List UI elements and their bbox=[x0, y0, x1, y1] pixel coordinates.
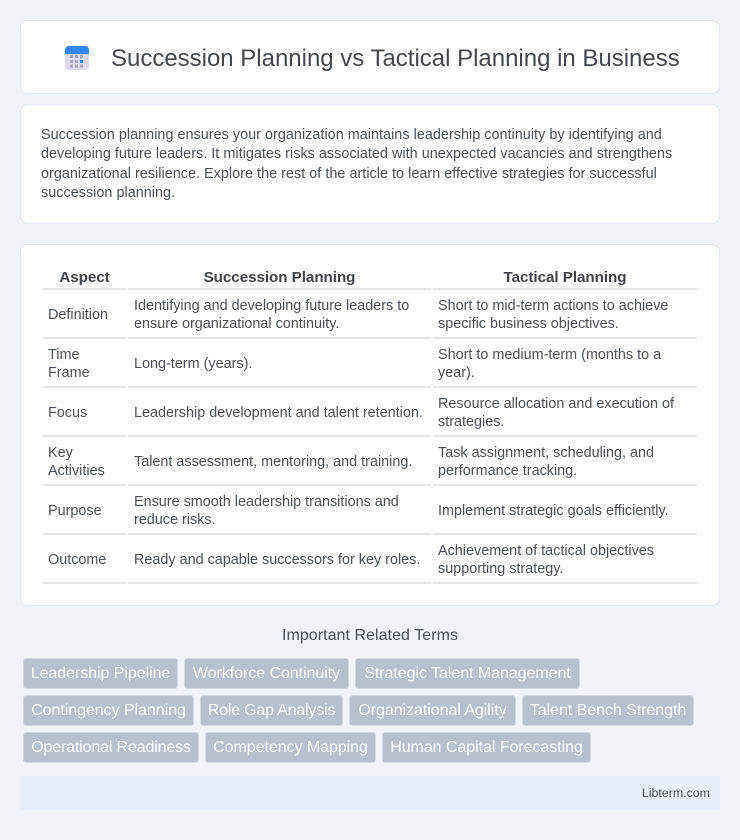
related terms tags: Workforce Continuity bbox=[193, 665, 340, 682]
related terms tags: Leadership Pipeline bbox=[31, 665, 170, 682]
row: purpose: reduce risks. bbox=[134, 512, 216, 528]
row: outcome bbox=[48, 543, 654, 577]
row: outcome: Outcome bbox=[48, 552, 106, 568]
related terms tags: Organizational Agility bbox=[358, 702, 507, 719]
row: time frame: Frame bbox=[48, 365, 90, 381]
comparison table bbox=[59, 269, 626, 286]
row: purpose: Ensure smooth leadership transitions and bbox=[134, 494, 399, 510]
title: Succession Planning vs Tactical Planning in Business bbox=[111, 45, 680, 72]
related terms tags: Strategic Talent Management bbox=[364, 665, 571, 682]
row: focus: Leadership development and talent retention. bbox=[134, 405, 423, 421]
row: definition: Short to mid-term actions to achieve bbox=[438, 298, 668, 314]
row: purpose: Purpose bbox=[48, 503, 102, 519]
row: definition bbox=[48, 298, 668, 332]
row: time frame: Time bbox=[48, 347, 79, 363]
row: definition: Identifying and developing future leaders to bbox=[134, 298, 409, 314]
row: outcome: supporting strategy. bbox=[438, 561, 563, 577]
intro text: organizational resilience. Explore the rest of the article to learn effective strategies for successful bbox=[41, 166, 657, 182]
header panel bbox=[20, 20, 720, 94]
column headers: Succession Planning bbox=[204, 269, 355, 286]
row: time frame: Short to medium-term (months to a bbox=[438, 347, 661, 363]
row: time frame: Long-term (years). bbox=[134, 356, 252, 372]
column headers bbox=[59, 269, 626, 286]
row: definition: specific business objectives. bbox=[438, 316, 619, 332]
related terms tags: Role Gap Analysis bbox=[208, 702, 335, 719]
footer credit: Libterm.com bbox=[642, 786, 710, 800]
intro text bbox=[41, 127, 672, 201]
intro text: Succession planning ensures your organization maintains leadership continuity by identifying and bbox=[41, 127, 662, 143]
row: key activities: Task assignment, scheduling, and bbox=[438, 445, 654, 461]
related terms tags: Talent Bench Strength bbox=[530, 702, 686, 719]
column headers: Aspect bbox=[59, 269, 110, 286]
row: time frame: year). bbox=[438, 365, 475, 381]
intro text: developing future leaders. It mitigates risks associated with unexpected vacancies and strengthens bbox=[41, 146, 672, 162]
row: focus: Resource allocation and execution of bbox=[438, 396, 674, 412]
row: key activities: Key bbox=[48, 445, 73, 461]
row: key activities: Activities bbox=[48, 463, 105, 479]
related terms heading: Important Related Terms bbox=[282, 627, 458, 644]
icon: calendar bbox=[65, 46, 89, 70]
row: focus bbox=[48, 396, 674, 430]
table panel bbox=[20, 244, 720, 606]
row: focus: strategies. bbox=[438, 414, 504, 430]
related terms tags: Operational Readiness bbox=[31, 739, 191, 756]
intro text: succession planning. bbox=[41, 185, 175, 201]
related terms tags: Contingency Planning bbox=[31, 702, 186, 719]
related terms tags: Competency Mapping bbox=[213, 739, 368, 756]
column headers: Tactical Planning bbox=[504, 269, 626, 286]
row: definition: ensure organizational continuity. bbox=[134, 316, 339, 332]
table rules bbox=[43, 288, 697, 584]
row: definition: Definition bbox=[48, 307, 108, 323]
row: focus: Focus bbox=[48, 405, 87, 421]
related terms tags bbox=[23, 658, 694, 763]
row: purpose bbox=[48, 494, 669, 528]
row: outcome: Ready and capable successors for key roles. bbox=[134, 552, 420, 568]
row: time frame bbox=[48, 347, 662, 381]
related terms tags: Human Capital Forecasting bbox=[390, 739, 583, 756]
row: purpose: Implement strategic goals efficiently. bbox=[438, 503, 669, 519]
row: key activities bbox=[48, 445, 654, 479]
row: outcome: Achievement of tactical objectives bbox=[438, 543, 654, 559]
row: key activities: performance tracking. bbox=[438, 463, 577, 479]
footer bar bbox=[20, 776, 720, 810]
row: key activities: Talent assessment, mentoring, and training. bbox=[134, 454, 412, 470]
intro panel bbox=[20, 104, 720, 224]
